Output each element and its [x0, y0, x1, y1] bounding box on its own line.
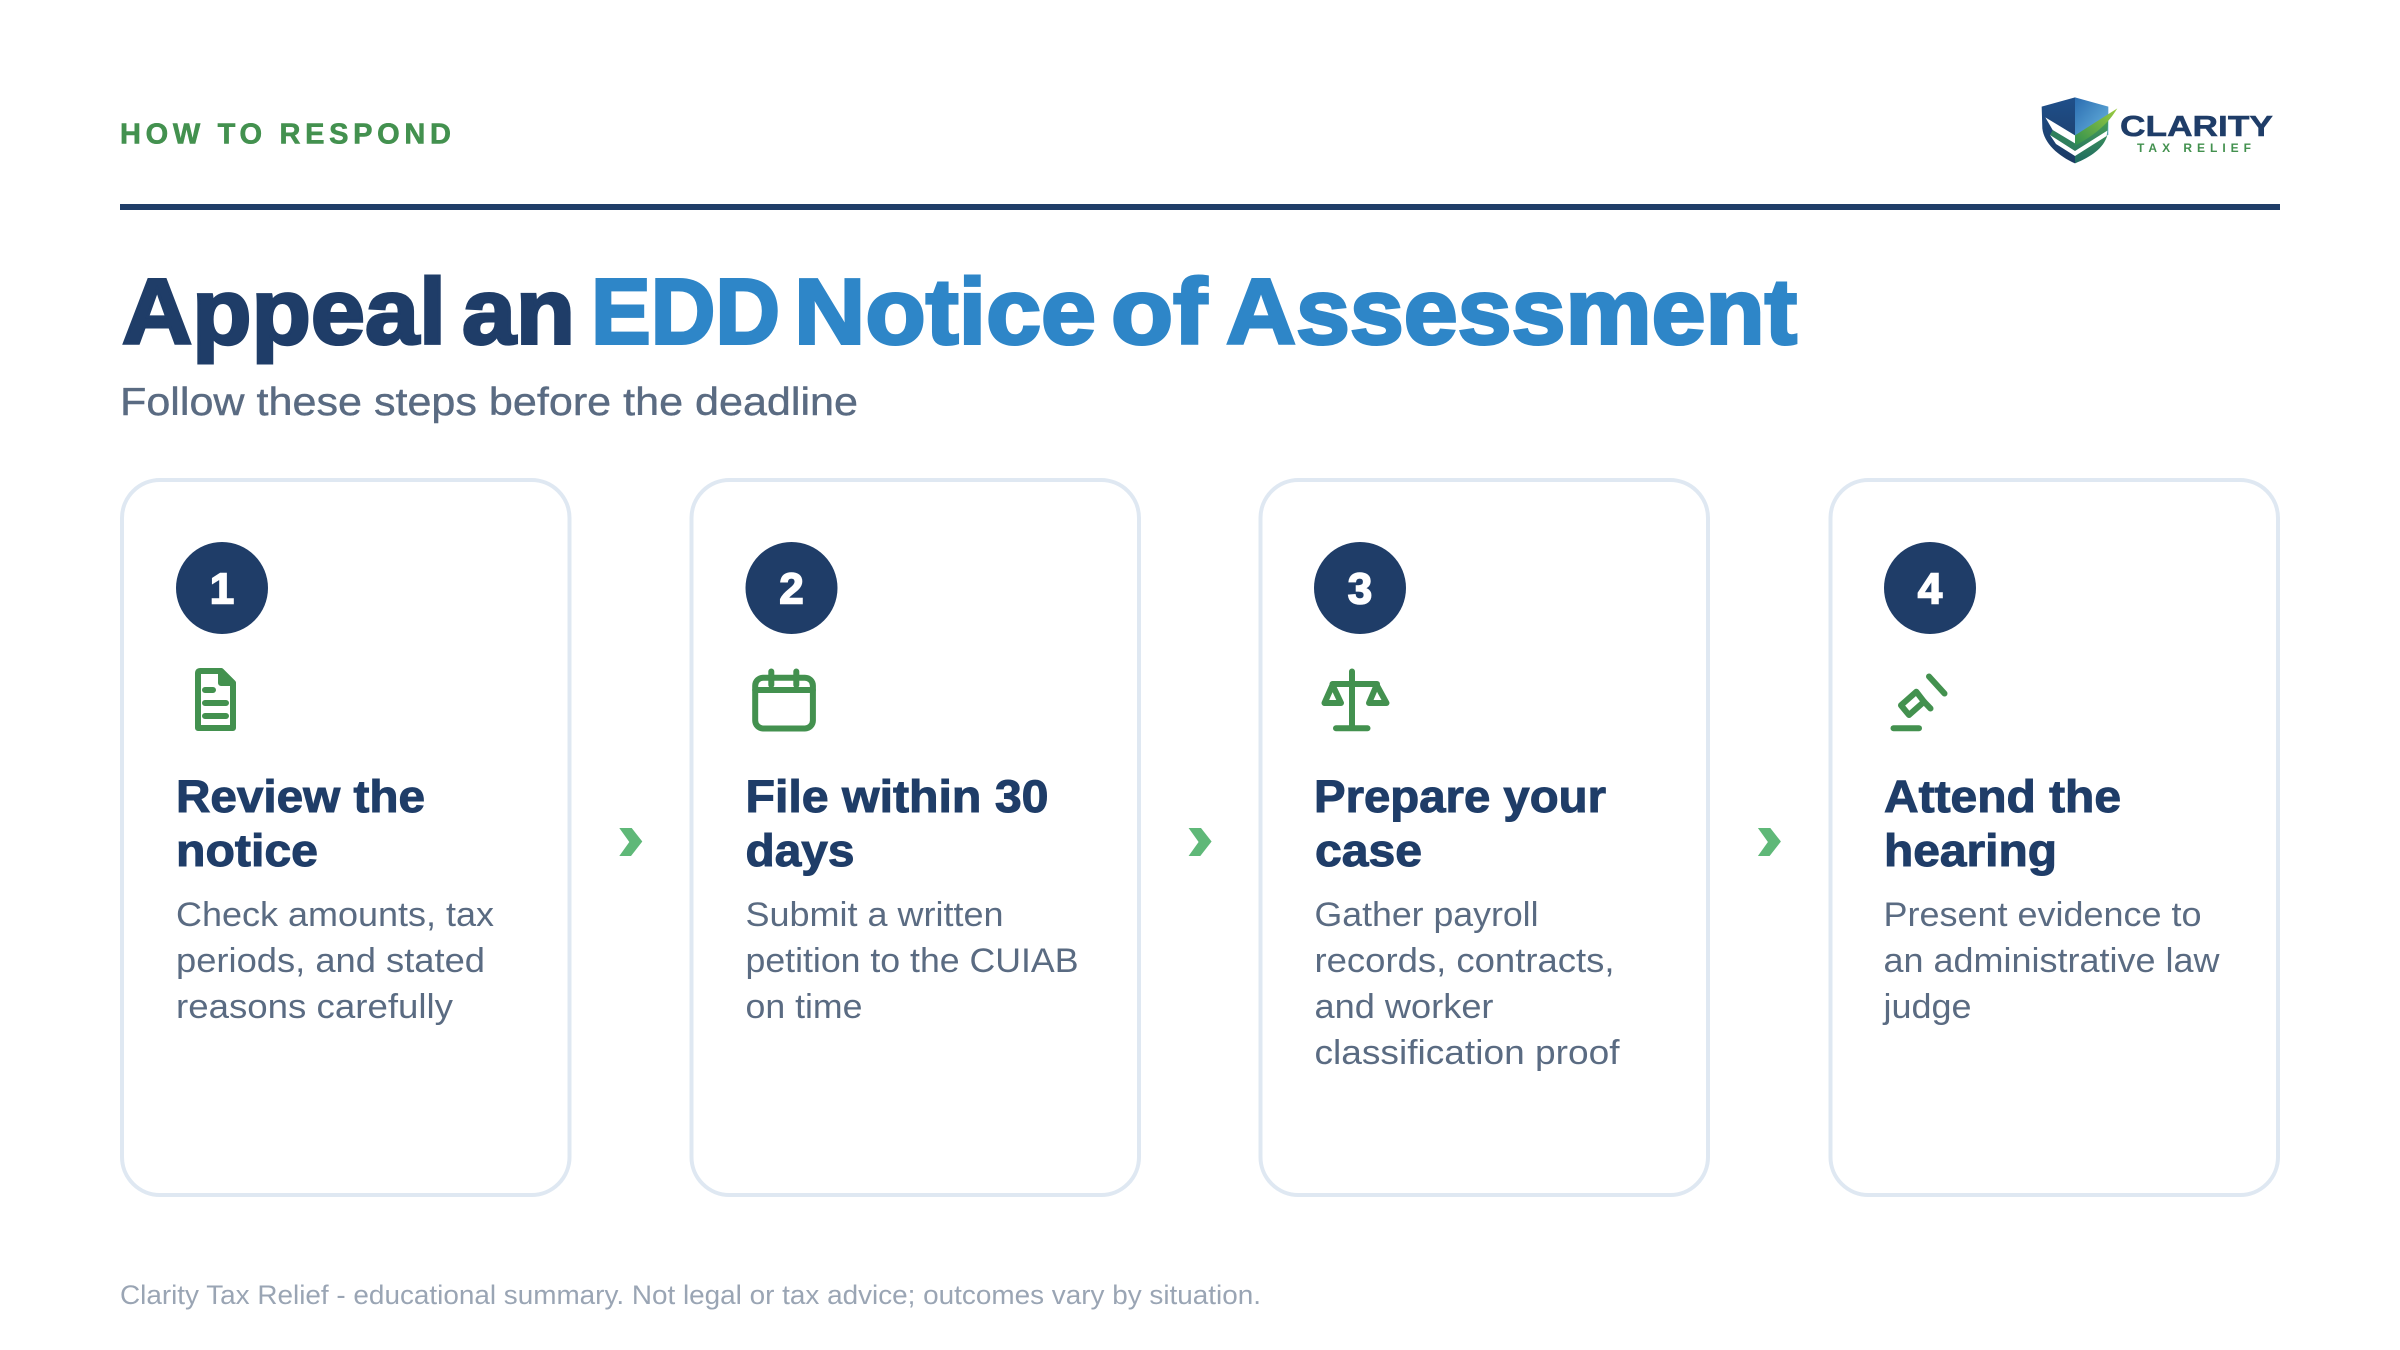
panel: step 4 [1830, 480, 2278, 1195]
icon: calendar [755, 672, 813, 728]
number badge 2: 2 [779, 564, 804, 614]
panel: step 2 [692, 480, 1139, 1195]
step 1 text: reasons carefully [176, 988, 453, 1026]
step 4 text: judge [1882, 988, 1972, 1026]
title part: dark: an [462, 260, 575, 364]
title part: blue: Notice [794, 260, 1096, 364]
step 3 text: and worker [1314, 988, 1494, 1026]
title part: dark [122, 260, 575, 364]
number badge 1: 1 [210, 564, 234, 614]
step 3 text [1314, 896, 1620, 1072]
step 1 text: periods, and stated [176, 942, 485, 980]
step 4 text: an administrative law [1884, 942, 2220, 980]
step 3 text: records, contracts, [1314, 942, 1614, 980]
number badge 3: 3 [1348, 564, 1372, 614]
panel: step 3 [1260, 480, 1708, 1195]
card outline [1260, 480, 1708, 1195]
logo tagline: TAX RELIEF [2137, 141, 2251, 155]
title part: blue: of [1111, 260, 1208, 364]
step 2 heading: File within 30 [746, 771, 1048, 822]
eyebrow: how to respond: HOW TO RESPOND [120, 118, 451, 150]
title part: dark: Appeal [122, 260, 446, 364]
title [122, 260, 1797, 364]
title part: blue: EDD [591, 260, 780, 364]
step 3 heading: Prepare your [1314, 771, 1606, 822]
icon: scales [1324, 672, 1386, 728]
step 2 text: Submit a written [746, 896, 1004, 934]
card outline [1830, 480, 2278, 1195]
step 4 text [1882, 896, 2220, 1026]
number badge 4: 4 [1918, 564, 1943, 614]
step 2 text: petition to the CUIAB [746, 942, 1078, 980]
step 3 heading: case [1315, 825, 1422, 876]
logo: Clarity Tax Relief [2042, 97, 2273, 163]
number badge 2 [746, 542, 838, 634]
number badge 1 [176, 542, 268, 634]
step 2 text [746, 896, 1078, 1026]
step 1 text [176, 896, 494, 1026]
step 1 heading [176, 771, 425, 876]
icon: gavel [1894, 676, 1944, 728]
step 1 text: Check amounts, tax [176, 896, 494, 934]
card outline [122, 480, 570, 1195]
header rule [120, 204, 2280, 210]
icon: shield [2042, 97, 2117, 163]
icon: document [198, 671, 233, 728]
card outline [692, 480, 1139, 1195]
arrow 3 [1758, 828, 1781, 856]
arrow 1 [619, 828, 642, 856]
logo wordmark: CLARITY [2120, 111, 2273, 143]
step 1 heading: notice [176, 825, 318, 876]
title part: blue [591, 260, 1797, 364]
step 3 text: Gather payroll [1314, 896, 1538, 934]
step 4 text: Present evidence to [1884, 896, 2202, 934]
step 2 heading: days [746, 825, 854, 876]
step 4 heading: hearing [1884, 825, 2057, 876]
title part: blue: Assessment [1226, 260, 1797, 364]
step 3 text: classification proof [1314, 1034, 1620, 1072]
arrow 2 [1189, 828, 1212, 856]
step 2 text: on time [746, 988, 862, 1026]
number badge 4 [1884, 542, 1976, 634]
step 4 heading: Attend the [1884, 771, 2121, 822]
step 4 heading [1884, 771, 2121, 876]
subtitle: Follow these steps before the deadline [120, 381, 858, 424]
footer disclaimer: Clarity Tax Relief - educational summary. Not legal or tax advice; outcomes vary by situation. [120, 1280, 1261, 1310]
step 2 heading [746, 771, 1048, 876]
step 1 heading: Review the [176, 771, 425, 822]
number badge 3 [1314, 542, 1406, 634]
panel: step 1 [122, 480, 570, 1195]
step 3 heading [1314, 771, 1606, 876]
